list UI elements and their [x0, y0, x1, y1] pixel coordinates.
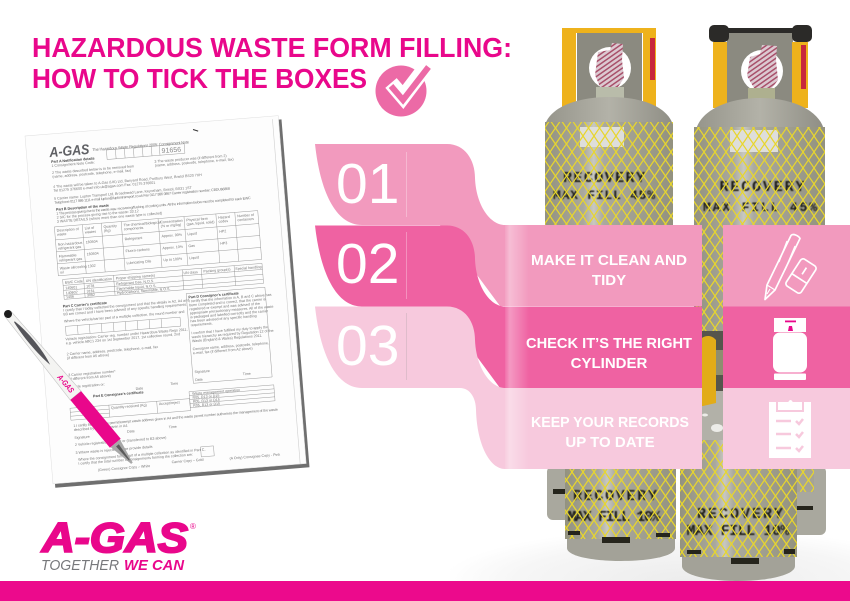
form: transport table [63, 263, 264, 299]
form: Part C carrier certificate: (if different from A5 above) [68, 374, 111, 381]
form: Part B description table: HP2 [219, 229, 226, 234]
form: Part B description table: 1302 [87, 264, 96, 268]
step 03 label: UP TO DATE [565, 434, 655, 451]
form: Part C carrier certificate: 3 Carrier registration number* [68, 369, 116, 377]
form: Part A details: 91656 [161, 147, 181, 155]
form: Part B description table [53, 192, 262, 276]
form: Part C carrier certificate: Date [135, 386, 143, 391]
form: Part A details: Tel 01275 376600 e-mail info.uk@agas.com Fax: 01275 376601 [53, 181, 155, 193]
cylinder: lower left: MAX FILL 10% [568, 509, 661, 526]
form: Part B description table: (% or mg/kg) [161, 223, 181, 228]
cylinder: top left [545, 28, 673, 232]
form: Part B description table: oil [60, 270, 64, 275]
form letterhead: The Hazardous Waste Regulations 2005: Consignment Note [92, 139, 190, 152]
form: transport table: EWC Code [65, 279, 83, 285]
panel: step 03 band [315, 306, 702, 469]
form: Part B description table: Hazard [218, 215, 230, 220]
form: Part E consignee certificate: Carrier Copy – Gold [171, 458, 204, 464]
form: Part B description table: Waste oil/cooling [60, 264, 87, 271]
cylinder: top right: RECOVERY [720, 179, 804, 196]
form: Part B description table: Concentration [160, 219, 183, 224]
form: Part E consignee certificate [69, 380, 282, 474]
form: transport table: UN identification [86, 277, 112, 283]
icon: tick badge [376, 64, 428, 116]
form: transport table: Proper shipping name(s) [116, 274, 155, 281]
form: Part B description table: (gas, liquid, solid) [186, 220, 215, 226]
cylinder: lower right: MAX FILL 10% [686, 523, 790, 540]
form: Part A details [51, 140, 236, 205]
step 02 label: CHECK IT’S THE RIGHT [526, 335, 692, 352]
form: Part E consignee certificate: Signature [74, 435, 90, 440]
step 01 label: TIDY [592, 272, 626, 289]
form: Part C carrier certificate: 2 Carrier name, address, postcode, telephone, e-mail, fax [66, 345, 158, 356]
cylinder: top left: MAX FILL 45% [553, 188, 655, 203]
form: Part E consignee certificate: Date [127, 429, 135, 434]
form: Part B description table: Physical form [186, 217, 208, 222]
form: transport table: 140602 [66, 290, 78, 295]
form: Part B description table: codes [218, 219, 228, 224]
form: Part C carrier certificate: Part C Carrier's certificate [63, 301, 107, 309]
cylinder: lower right: RECOVERY [697, 506, 783, 523]
form: Part D consignor certificate: registered or exempt and was advised of the [189, 302, 260, 311]
form: Part D consignor certificate: e-mail, fax (if different from A2 above) [193, 346, 253, 355]
form: Part E consignee certificate: Part E Consignee's certificate [93, 390, 144, 398]
title [32, 32, 512, 94]
form: Part B description table: Flammable [59, 253, 77, 259]
form: Part B description table: Lubricating Oils [126, 259, 152, 265]
form: Part B description table: Fluoro-carbons [125, 247, 150, 253]
form: transport table: Packing group(s) [203, 267, 231, 274]
title: HAZARDOUS WASTE FORM FILLING: [32, 32, 512, 63]
form: Part E consignee certificate: 2 Vehicle registration number or (transferred to E3 above) [75, 436, 167, 447]
form: Part B description table: HP3 [220, 241, 227, 246]
cylinder: top left: RECOVERY [563, 170, 645, 187]
form: Part B description table: List of [84, 226, 94, 231]
form: Part B description table: 3 WASTE DETAILS (where more than one waste type is collected) [57, 211, 162, 224]
form: Part B description table: containers [237, 217, 254, 222]
form letterhead: A-GAS [48, 141, 90, 160]
form: Part D consignor certificate: Waste (England & Wales) Regulations 2011. [192, 334, 263, 343]
step number 02: 02 [336, 232, 399, 296]
form: Part C carrier certificate: B3 are correct and I have been advised of any specific handling requirements. [63, 303, 187, 316]
form: Part B description table: Liquid [187, 232, 197, 236]
panel: icon tile 03 [723, 388, 850, 469]
form: Part C carrier certificate: e.g. vehicle ABC1 234 on 1st September 2017, 1st collection round, 2nd [66, 332, 180, 345]
form: Part A details: 3 The waste producer was (if different from 2) [154, 154, 227, 164]
step 03 label: KEEP YOUR RECORDS [531, 414, 689, 431]
form: Part D consignor certificate: Date [195, 378, 203, 382]
step 02 label: CYLINDER [571, 355, 648, 372]
form: Part A details: (name, address, postcode, telephone, e-mail, fax) [52, 169, 131, 179]
form: transport table: 1078 [86, 284, 94, 289]
form: Part C carrier certificate: Where the vehicle/carrier part of a multiple collection, the round number and [64, 310, 185, 323]
form: transport table: 140601 [65, 285, 77, 290]
form: Part A details: (name, address, postcode, telephone, e-mail, fax) [155, 157, 234, 168]
step number 03: 03 [336, 314, 399, 378]
form: transport table: 1406 [66, 295, 74, 299]
form: Part E consignee certificate: 1 I certify that the waste permit/exempt waste address given in A4 and the waste permit number authorises the management of the waste [73, 408, 278, 428]
logo: A-GAS: TOGETHER [41, 557, 119, 574]
panel: step 01 band [315, 144, 702, 306]
form: Part D consignor certificate: is packaged and labelled correctly and the carrier [190, 309, 269, 319]
photo: gas cylinders [545, 25, 826, 581]
form: Part D consignor certificate: has been advised of any specific handling [190, 314, 257, 323]
form: Part B description table: waste [57, 232, 67, 237]
form: Part B description table: 160504 [87, 251, 99, 256]
form: Part D consignor certificate: Signature [194, 369, 210, 374]
form: Part C carrier certificate: Vehicle registration or: [69, 382, 105, 389]
logo: A-GAS: ® [190, 522, 196, 531]
cylinder: top right [694, 25, 825, 331]
form: Part C carrier certificate: Vehicle registration: Carrier reg. number under Hazardous Waste Regs 2011, [65, 328, 188, 341]
form: Part B description table: The chemical/biological [123, 220, 161, 227]
form: transport table: UN class [183, 270, 198, 275]
form: Part C carrier certificate [63, 294, 196, 396]
form: Part E consignee certificate: described by the code given in A4. [74, 424, 128, 432]
form: Part A details: 2 The waste described below is to be removed from [52, 164, 134, 175]
form: Part E consignee certificate: R05, R13 or D15 [193, 402, 220, 408]
cylinder: lower left [565, 466, 676, 561]
form: Part D consignor certificate: Time [243, 372, 251, 376]
form: transport table: 3161 [87, 289, 95, 294]
footer bar [0, 581, 850, 601]
form: Part B description table: Quantity [103, 224, 117, 229]
form: Part B description table: Approx. 90% [161, 233, 183, 238]
form: Part B description table: Non-hazardous [58, 241, 83, 247]
form: Part A details: Part A Notification details [51, 157, 95, 164]
form: Part C carrier certificate: Time [170, 382, 178, 386]
form: Part B description table: components [124, 226, 144, 231]
form: Part D consignor certificate: been completed and is correct, that the carrier is [189, 297, 266, 307]
logo: A-GAS: A-GAS [41, 514, 188, 561]
pen [0, 306, 137, 468]
form: Part A details: 1 Consignment Note Code: [51, 161, 95, 168]
step number 01: 01 [336, 152, 399, 216]
form: transport table: Flammable liquid, N.O.S. [116, 284, 157, 291]
panel: icon tile 01 [723, 225, 850, 306]
form: Part D consignor certificate: requirements. [191, 322, 213, 327]
form: Part D consignor certificate: I certify that the information in A, B and C above has [189, 293, 272, 303]
icon: cylinder [773, 318, 807, 380]
form: Part C carrier certificate: I certify that I today collected the consignment and that the details in A2, A4 and [63, 298, 189, 312]
form: Part E consignee certificate: (A Only) Consignee Copy - Pink [229, 453, 280, 461]
form: Part E consignee certificate: 3 Where waste is rejected please provide details [75, 445, 153, 455]
logo: A-GAS: WE CAN [124, 557, 185, 574]
panel: icon tile 02 [723, 306, 850, 388]
form: Part D consignor certificate: Part D Consignor's certificate [188, 291, 239, 299]
title: HOW TO TICK THE BOXES [32, 63, 367, 94]
form: Part B description table: Up to 100% [163, 257, 183, 262]
panel: step 02 band [315, 226, 702, 388]
form: Part E consignee certificate: Time [169, 425, 177, 429]
cylinder: lower right [680, 440, 797, 581]
form: Part E consignee certificate: Waste management operation [192, 388, 240, 396]
form: Part E consignee certificate: I certify that the total number of consignments forming the collection are: [78, 453, 193, 466]
form: Part A details: Telephone 0117 986 1111 e-mail lupton@luptontransport.co.uk Fax 0117 986 0867 Carrier registration number: CBDU66868 [54, 187, 230, 205]
form: Part E consignee certificate: (Green) Consignor Copy – White [98, 464, 150, 472]
form: Part B description table: Gas [188, 244, 195, 248]
form: Part E consignee certificate: Quantity received (Kg) [111, 403, 147, 410]
form: Part B description table: Approx. 10% [162, 245, 184, 250]
form: Part A details: 5 Carrier name: Lupton Transport Ltd, Broadmead Lane, Keynsham, Bristol, BS31 1ST [54, 186, 193, 201]
step 01 label: MAKE IT CLEAN AND [531, 252, 687, 269]
form: Part E consignee certificate: R05, R13 or D15 [192, 394, 220, 400]
form letterhead [48, 133, 190, 160]
form: Part B description table: 1 The process giving rise to the waste was: recovering/flushing of cooling units. All the information below must be completed for each EWC [56, 196, 251, 216]
form: Part B description table: Number of [237, 213, 254, 218]
form: transport table: 3082 [87, 293, 95, 298]
form: Part B description table: refrigerant gas [58, 245, 82, 251]
form: Part B description table: Description of [57, 227, 79, 233]
form: Part D consignor certificate: waste hierarchy as required by Regulation 12 of the [192, 329, 274, 339]
form: transport table: Special handling [235, 265, 262, 271]
pen logo: A-GAS [55, 372, 76, 395]
form: Part C carrier certificate: (if different from A5 above) [67, 353, 109, 360]
form: Part D consignor certificate: appropriate precautionary measures. All of the waste [190, 305, 274, 315]
form: Part B description table: 160504 [86, 240, 98, 244]
cylinder: rear lower right [790, 466, 826, 535]
form: Part E consignee certificate: Accept/reject [159, 400, 180, 406]
form: Part D consignor certificate: Consignor name, address, postcode, telephone, [192, 341, 269, 351]
form: Part B description table: Liquid [189, 255, 199, 260]
form: transport table: Hydrocarbons, flammable, N.O.S. [117, 287, 171, 295]
form: Part B description table: Part B Description of the waste [56, 203, 109, 212]
form: Part B description table: Refrigerant [124, 236, 142, 241]
form: Part E consignee certificate: R05, R13 or D15 [193, 398, 220, 404]
form: Part D consignor certificate [186, 287, 279, 383]
form: Part B description table: wastes [85, 230, 96, 234]
form: Part B description table: (Kg) [104, 228, 111, 233]
cylinder: lower middle handle seen through the gap [702, 331, 724, 441]
cylinder: lower left: RECOVERY [573, 488, 657, 505]
form: Part D consignor certificate: I confirm that I have fulfilled my duty to apply the [191, 325, 268, 335]
form: Part A details: 4 The waste will be taken to A-Gas (UK) Ltd, Banyard Road, Portbury West, Bristol BS20 7XH [53, 173, 202, 189]
cylinder: top right: MAX FILL 45% [703, 200, 817, 215]
photo floor background [450, 496, 850, 581]
form: Part B description table: 2 SIC for the process giving rise to the waste: 33.12 [56, 209, 139, 220]
form: Part E consignee certificate: Where the consignment forms part of a multiple collection as identified in Part C, [78, 448, 206, 462]
cylinder: rear lower left [547, 466, 571, 520]
icon: clipboard checklist [769, 400, 811, 458]
icon: pencil and eraser [765, 235, 817, 300]
logo: A-GAS [41, 514, 196, 574]
form: transport table: Refrigerant Gas, N.O.S. [116, 279, 154, 286]
document: consignment note form [25, 115, 309, 488]
form: Part B description table: refrigerant gas [59, 257, 83, 263]
